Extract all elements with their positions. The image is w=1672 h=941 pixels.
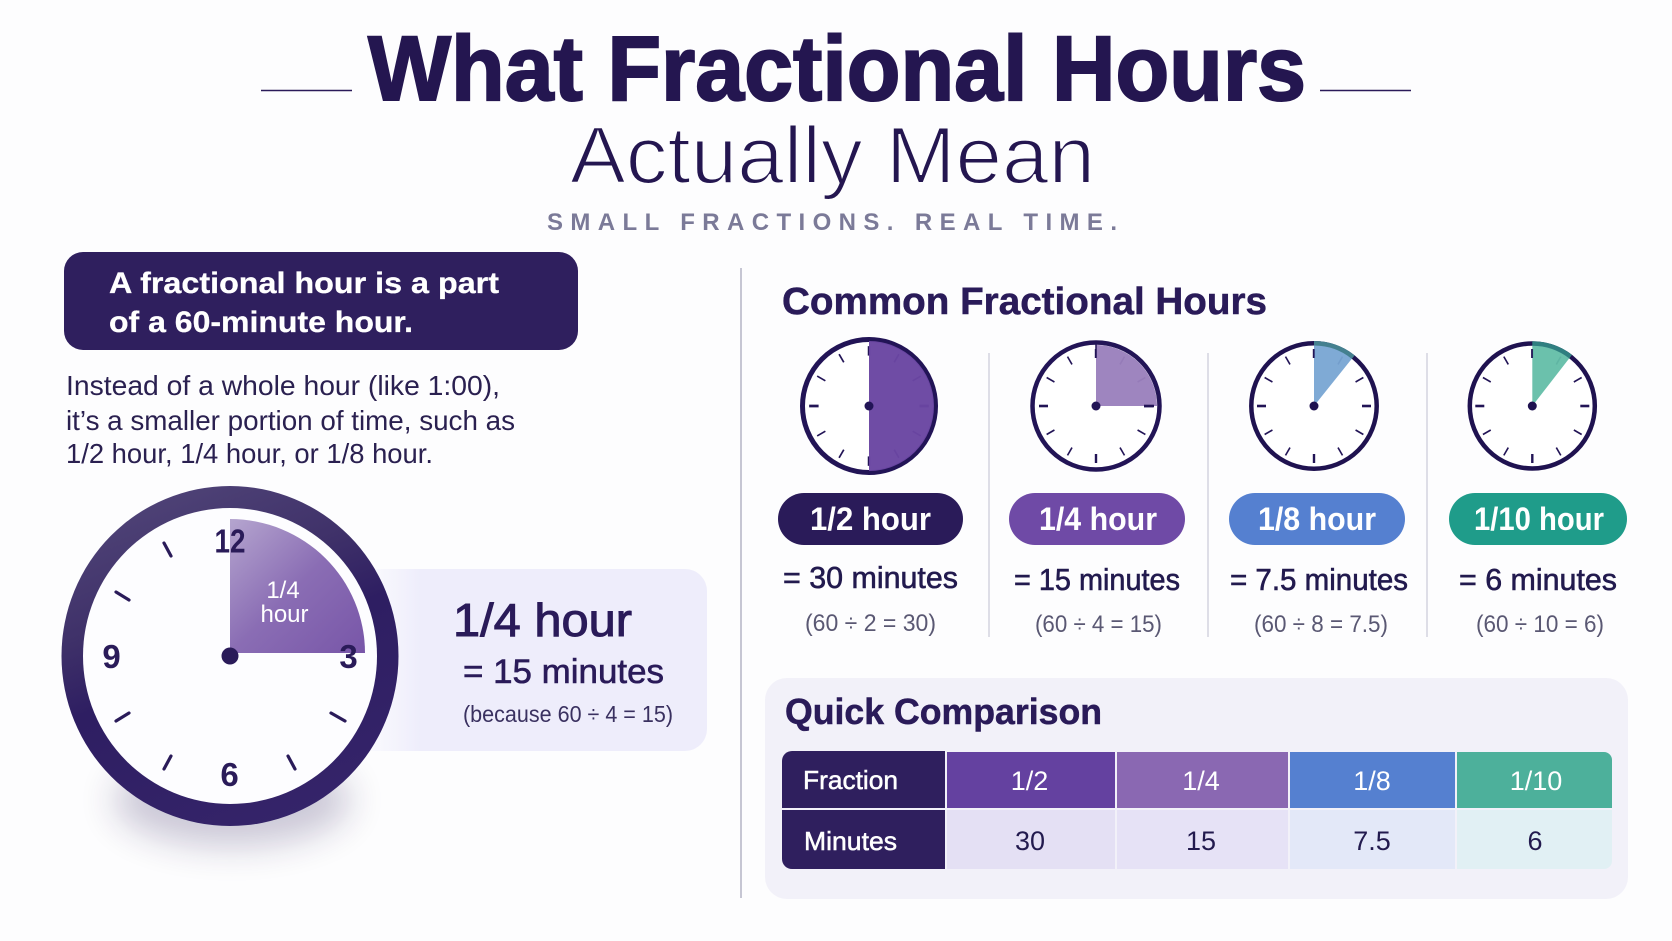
quarter wedge bbox=[230, 519, 365, 653]
title bbox=[368, 18, 1306, 201]
callout: one quarter hour: 1/4 hour bbox=[453, 594, 632, 646]
column: one half hour: 1/2 hour bbox=[810, 501, 931, 537]
subtitle line: Actually Mean: Actually Mean bbox=[570, 111, 1095, 201]
column: one eighth hour: 1/8 hour bbox=[1258, 501, 1376, 537]
comparison table: 1/2 bbox=[1011, 766, 1048, 796]
column: one tenth hour: = 6 minutes bbox=[1459, 562, 1617, 597]
icon: tenth clock bbox=[1470, 344, 1595, 468]
panel: definition banner: A fractional hour is a part bbox=[109, 267, 499, 300]
column: one half hour: (60 ÷ 2 = 30) bbox=[805, 610, 936, 637]
text block: explanation bbox=[66, 370, 515, 469]
heading: common fractional hours: Common Fractional Hours bbox=[782, 281, 1267, 323]
text block: explanation: Instead of a whole hour (like 1:00), bbox=[66, 370, 500, 401]
column: one half hour: = 30 minutes bbox=[783, 560, 958, 595]
column: one eighth hour: (60 ÷ 8 = 7.5) bbox=[1254, 611, 1388, 638]
panel: definition banner bbox=[64, 252, 578, 350]
comparison table: Minutes bbox=[804, 826, 897, 856]
column: one tenth hour bbox=[1449, 344, 1627, 638]
comparison table: 1/8 bbox=[1353, 766, 1391, 796]
callout: one quarter hour: (because 60 ÷ 4 = 15) bbox=[463, 701, 673, 727]
column: one tenth hour: 1/10 hour bbox=[1474, 501, 1604, 537]
large clock: 3 bbox=[339, 638, 358, 675]
column: one half hour bbox=[778, 340, 963, 637]
large clock: 12 bbox=[214, 522, 246, 560]
comparison table: 15 bbox=[1186, 826, 1216, 856]
comparison table: Fraction bbox=[803, 765, 898, 795]
text block: explanation: it’s a smaller portion of time, such as bbox=[66, 405, 515, 436]
column: one quarter hour: (60 ÷ 4 = 15) bbox=[1035, 611, 1162, 638]
icon: half clock bbox=[802, 340, 936, 472]
column: one quarter hour bbox=[1009, 342, 1185, 638]
large clock: 9 bbox=[102, 638, 121, 675]
large clock: 6 bbox=[220, 756, 239, 793]
column: one eighth hour bbox=[1229, 343, 1408, 638]
comparison table: 30 bbox=[1015, 826, 1045, 856]
icon: quarter clock bbox=[1032, 342, 1160, 470]
column: one quarter hour: 1/4 hour bbox=[1039, 501, 1157, 537]
panel: quick comparison bbox=[765, 678, 1628, 899]
comparison table: 6 bbox=[1527, 826, 1543, 856]
comparison table: 7.5 bbox=[1353, 826, 1391, 856]
callout: one quarter hour bbox=[370, 569, 707, 751]
callout: one quarter hour: = 15 minutes bbox=[463, 653, 664, 691]
column: one quarter hour: = 15 minutes bbox=[1014, 562, 1180, 597]
icon: eighth clock bbox=[1251, 343, 1377, 469]
comparison table: 1/4 bbox=[1182, 766, 1220, 796]
large clock bbox=[62, 486, 398, 846]
text block: explanation: 1/2 hour, 1/4 hour, or 1/8 hour. bbox=[66, 438, 433, 469]
large clock: hour bbox=[260, 601, 309, 628]
large clock: 1/4 bbox=[266, 577, 300, 604]
panel: definition banner: of a 60-minute hour. bbox=[109, 306, 413, 339]
comparison table: 1/10 bbox=[1510, 766, 1562, 796]
title: What Fractional Hours bbox=[368, 18, 1306, 120]
column: one eighth hour: = 7.5 minutes bbox=[1230, 562, 1408, 597]
tagline: SMALL FRACTIONS. REAL TIME. bbox=[547, 209, 1117, 236]
comparison table bbox=[782, 751, 1612, 869]
column: one tenth hour: (60 ÷ 10 = 6) bbox=[1476, 611, 1604, 638]
heading: quick comparison: Quick Comparison bbox=[785, 691, 1102, 732]
